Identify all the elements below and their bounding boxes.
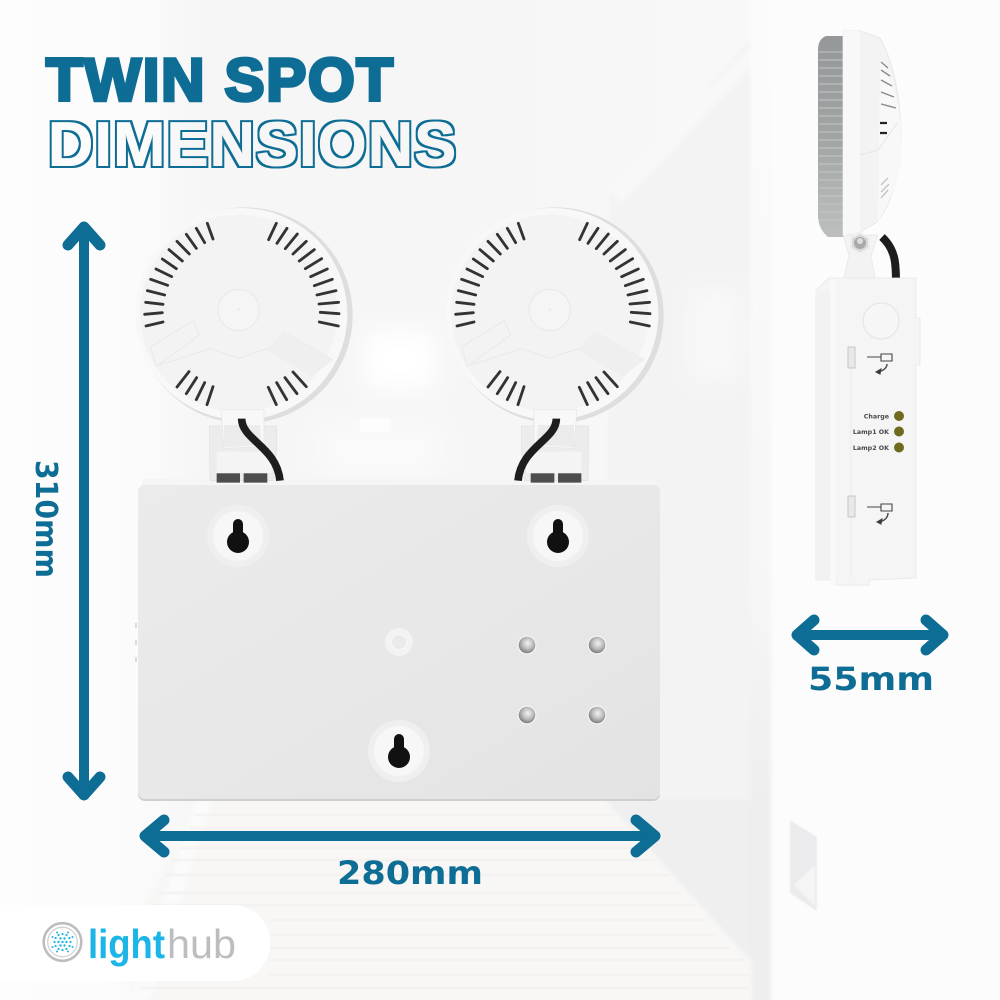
- logo icon: [44, 923, 81, 961]
- title: [46, 46, 456, 180]
- keyhole top left: [207, 505, 269, 567]
- arrow: depth 55mm: [797, 620, 943, 650]
- side lamp cable: [882, 237, 896, 283]
- logo wordmark: hub: [167, 921, 236, 967]
- side control box: [816, 278, 920, 585]
- label: 280mm: 280mm: [337, 854, 483, 892]
- indicator labels: [853, 414, 890, 452]
- logo badge: [0, 905, 270, 981]
- label: 310mm: 310mm: [28, 460, 63, 578]
- indicator labels: Lamp1 OK: [853, 429, 890, 436]
- side lamp pivot bolt: [851, 233, 869, 253]
- right lamp head: [446, 207, 664, 423]
- left lamp bracket: [209, 410, 280, 483]
- title line: TWIN SPOT: TWIN SPOT: [46, 46, 393, 113]
- left lamp head: [135, 207, 353, 423]
- mounting circle: [863, 303, 899, 339]
- clip upper: [848, 347, 855, 368]
- label: 55mm: 55mm: [808, 660, 934, 698]
- right lamp bracket: [518, 410, 589, 483]
- screws: [518, 636, 606, 724]
- indicator labels: Lamp2 OK: [853, 445, 890, 452]
- title line: DIMENSIONS: DIMENSIONS: [48, 110, 456, 180]
- side lamp bracket: [843, 235, 878, 282]
- arrow: width 280mm: [145, 820, 655, 852]
- indicator labels: Charge: [864, 414, 889, 420]
- keyhole top right: [527, 505, 589, 567]
- centre ring: [385, 628, 413, 656]
- side lamp housing: [843, 31, 901, 236]
- product: side view: [816, 31, 920, 585]
- screwdriver icon upper: [867, 354, 892, 374]
- product: front view twin spot: [135, 207, 664, 801]
- battery box: [136, 479, 660, 801]
- side lamp lens: [818, 36, 844, 237]
- clip lower: [848, 496, 855, 517]
- keyhole bottom: [368, 720, 430, 782]
- indicator LEDs: [894, 411, 904, 452]
- logo wordmark: light: [88, 921, 165, 967]
- badge background: [0, 905, 270, 981]
- screwdriver icon lower: [867, 504, 892, 524]
- arrow: height 310mm: [68, 227, 100, 795]
